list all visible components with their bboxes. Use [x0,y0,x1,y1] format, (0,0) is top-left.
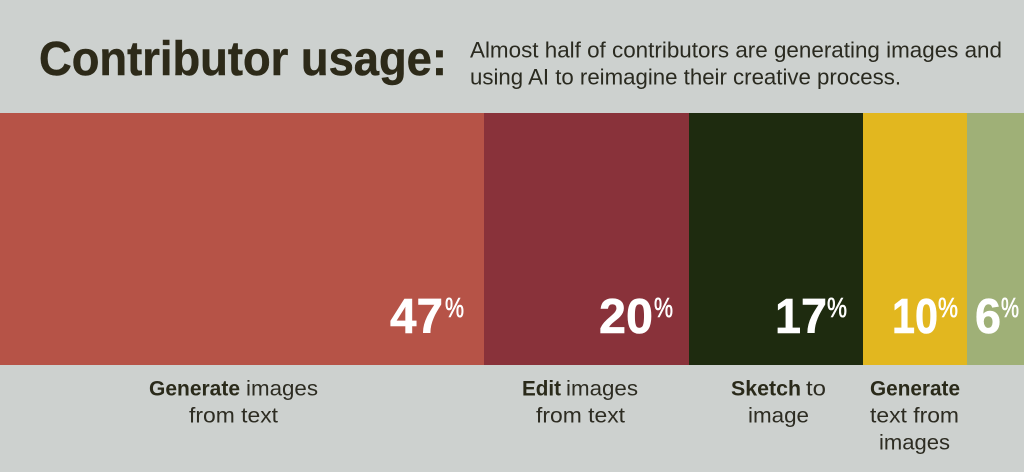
label: edit images from text: images [566,376,638,400]
subtitle text: Almost half of contributors are generating images and [470,38,1002,62]
label: generate images from text: Generate [149,376,240,400]
label: generate text from images: Generate [870,376,960,400]
segment: generate images from text 47% [0,113,484,365]
segment: sketch to image 17%: % [827,292,847,323]
label: sketch to image: image [748,404,809,428]
segment: generate text from images 10%: % [938,292,958,323]
label: generate text from images [870,376,960,454]
label: edit images from text: Edit [522,376,561,400]
segment: generate images from text 47%: 47 [390,290,443,344]
segment: edit images from text 20%: 20 [599,290,653,344]
segment: edit images from text 20% [484,113,689,365]
segment: sketch to image 17% [689,113,863,365]
title: Contributor usage: [39,33,447,86]
segment: sketch to image 17%: 17 [775,290,827,344]
subtitle text: using AI to reimagine their creative process. [470,64,901,90]
label: generate images from text [149,376,318,428]
label: generate images from text: images [246,376,318,400]
segment: other 6% [967,113,1024,365]
label: generate text from images: text from [870,404,959,428]
label: generate images from text: from text [189,404,278,428]
segment: other 6%: 6 [975,290,1001,344]
label: edit images from text: from text [536,404,625,428]
label: sketch to image: Sketch [731,376,801,400]
stacked bar chart [0,113,1024,365]
label: edit images from text [522,376,638,428]
segment: generate text from images 10% [863,113,967,365]
label: generate text from images: images [879,430,950,454]
segment: edit images from text 20%: % [654,292,673,323]
subtitle text [470,38,1002,90]
segment: generate images from text 47%: % [445,292,464,323]
segment: generate text from images 10%: 10 [892,290,938,344]
label: sketch to image [731,376,826,428]
label: sketch to image: to [806,376,826,400]
